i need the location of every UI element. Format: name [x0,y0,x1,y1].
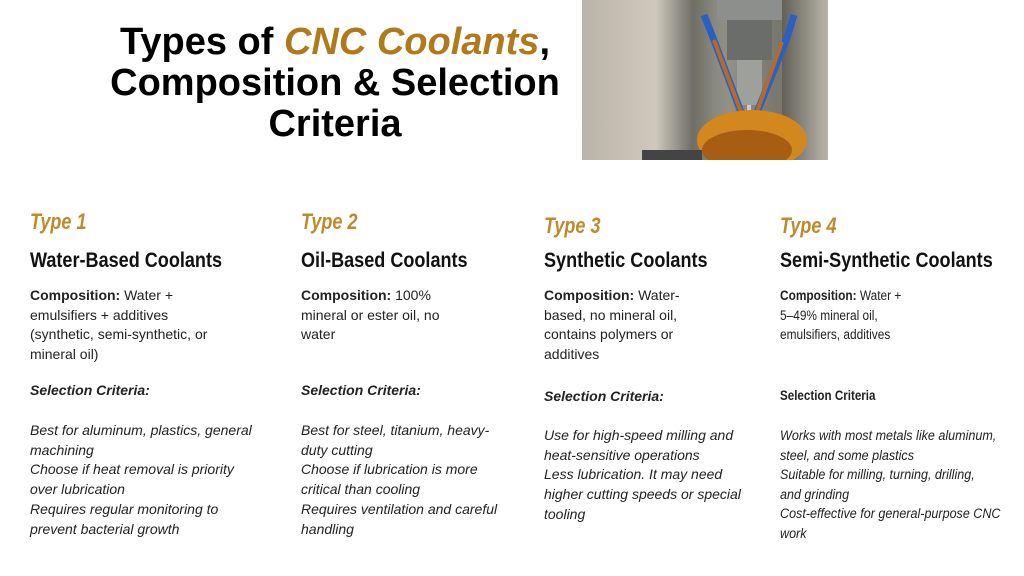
composition 3: Composition: Water- [544,287,680,303]
criteria 4: and grinding [780,486,849,502]
criteria 2: Choose if lubrication is more [301,461,478,477]
composition 3: contains polymers or [544,326,673,342]
criteria 1: machining [30,442,94,458]
criteria 4: steel, and some plastics [780,448,914,462]
composition 1 [30,287,208,362]
composition 1: mineral oil) [30,346,98,362]
criteria 2: critical than cooling [301,481,420,497]
composition 3 [544,287,680,362]
criteria 1: Choose if heat removal is priority [30,461,234,477]
criteria 2: Best for steel, titanium, heavy- [301,422,489,438]
criteria 4: Cost-effective for general-purpose CNC [780,506,1001,521]
criteria 2: Requires ventilation and careful [301,501,497,517]
column: type 2 [301,209,498,537]
label: type 3: Type 3 [544,213,600,238]
column: type 4 [780,213,1001,540]
criteria 2: duty cutting [301,442,373,458]
selection label 3: Selection Criteria: [544,388,664,404]
criteria 3: higher cutting speeds or special [544,486,741,502]
composition 4: 5–49% mineral oil, [780,308,878,323]
criteria 2: handling [301,521,354,537]
composition 3: based, no mineral oil, [544,307,677,323]
label: type 4: Type 4 [780,213,836,238]
label: type 1: Type 1 [30,209,86,234]
composition 2: Composition: 100% [301,287,431,303]
title [110,21,560,145]
criteria 4: Suitable for milling, turning, drilling, [780,467,975,482]
criteria 1 [30,422,252,537]
title: Criteria [268,103,402,145]
heading: synthetic: Synthetic Coolants [544,249,708,272]
composition 3: additives [544,346,599,362]
selection label 1: Selection Criteria: [30,382,150,398]
selection label 4: Selection Criteria [780,388,876,403]
heading: oil-based: Oil-Based Coolants [301,249,468,272]
criteria 1: Best for aluminum, plastics, general [30,422,252,438]
selection label 2: Selection Criteria: [301,382,421,398]
title: Types of CNC Coolants, [120,21,550,63]
criteria 4: Works with most metals like aluminum, [780,428,996,443]
criteria 1: prevent bacterial growth [30,521,179,537]
criteria 2 [301,422,498,537]
criteria 3: Less lubrication. It may need [544,466,722,482]
criteria 3 [544,427,742,522]
composition 1: (synthetic, semi-synthetic, or [30,326,207,342]
title: Composition & Selection [110,62,560,104]
criteria 1: over lubrication [30,481,125,497]
criteria 4 [780,428,1001,540]
criteria 1: Requires regular monitoring to [30,501,218,517]
label: type 2: Type 2 [301,209,357,234]
composition 4: Composition: Water + [780,288,901,303]
criteria 3: Use for high-speed milling and [544,427,733,443]
composition 4 [780,288,901,342]
criteria 3: heat-sensitive operations [544,447,700,463]
composition 1: Composition: Water + [30,287,173,303]
composition 2 [301,287,440,342]
composition 1: emulsifiers + additives [30,307,168,323]
criteria 3: tooling [544,506,585,522]
photo: CNC machine with coolant [582,0,828,160]
column: type 1 [30,209,252,537]
heading: semi-synthetic: Semi-Synthetic Coolants [780,249,993,272]
column: type 3 [544,213,742,522]
composition 2: mineral or ester oil, no [301,307,440,323]
composition 2: water [301,326,335,342]
heading: water-based: Water-Based Coolants [30,249,222,272]
criteria 4: work [780,526,807,540]
composition 4: emulsifiers, additives [780,327,890,342]
